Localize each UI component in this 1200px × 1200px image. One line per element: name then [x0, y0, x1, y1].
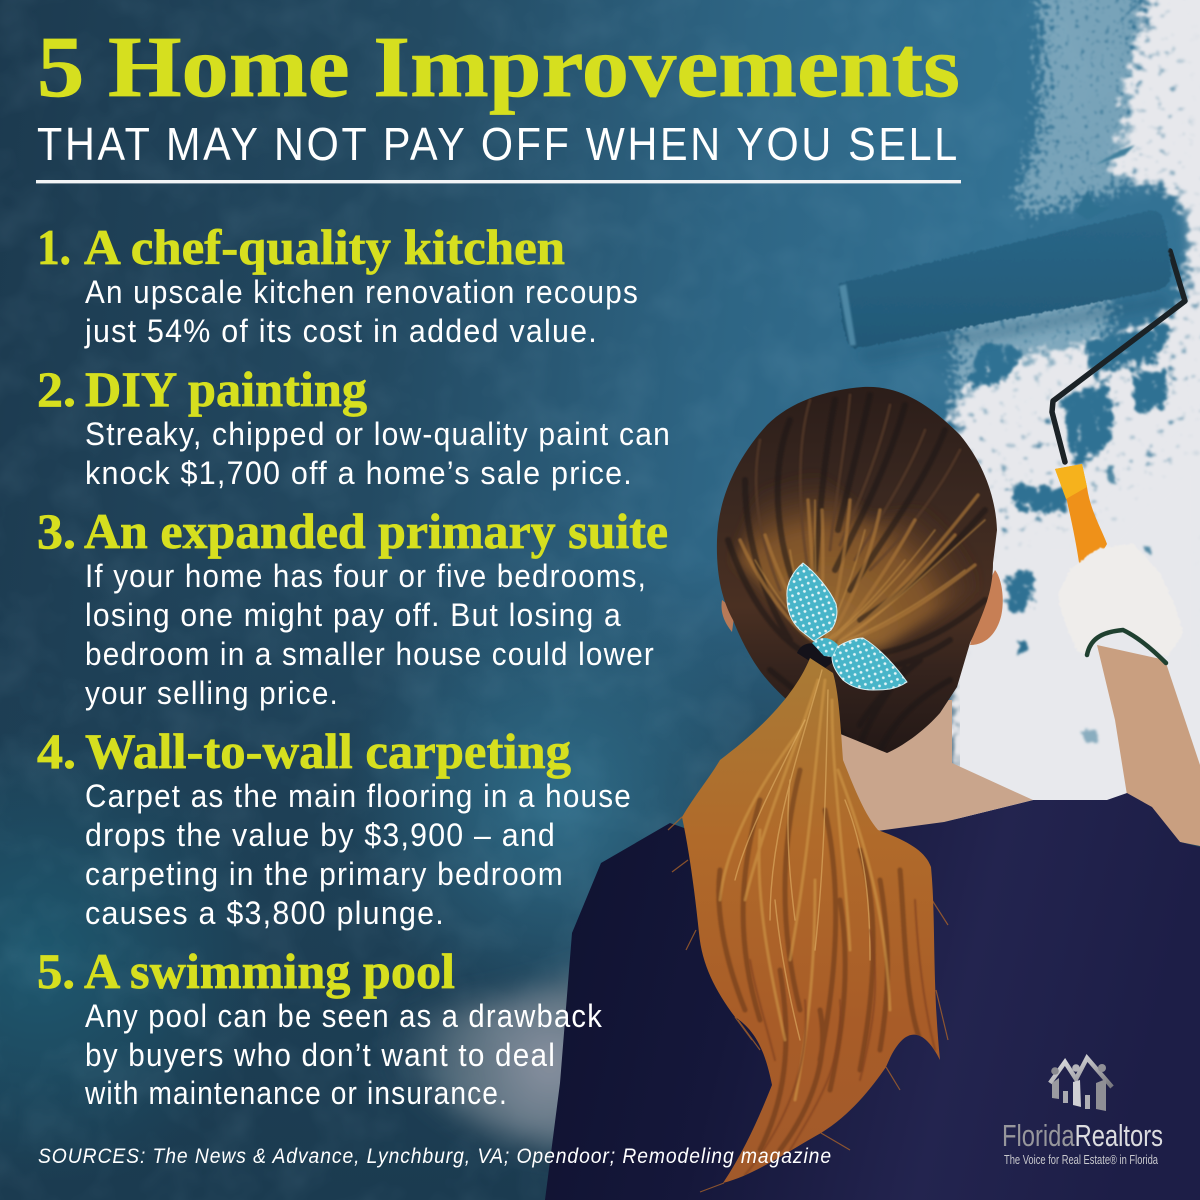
shirt	[545, 793, 1200, 1200]
ponytail	[668, 658, 948, 1192]
neck	[820, 700, 1033, 832]
item 3 heading: An expanded primary suite	[84, 503, 668, 559]
item 5: swimming pool	[37, 943, 603, 1111]
arm	[1097, 645, 1200, 846]
caramel highlight band	[734, 486, 964, 652]
item 4 text: carpeting in the primary bedroom	[85, 856, 564, 892]
large paint blotches	[960, 318, 1175, 616]
item 5 text	[84, 998, 603, 1111]
bow right loop	[832, 638, 907, 690]
item 1 text: just 54% of its cost in added value.	[84, 313, 598, 349]
logo: Florida Realtors	[1002, 1058, 1163, 1167]
item 2 text: Streaky, chipped or low-quality paint can	[85, 416, 671, 452]
item 4 heading: 4.	[37, 723, 76, 779]
woman's hair	[668, 387, 1003, 1192]
speckled dry-brush paint	[1000, 0, 1150, 230]
roller shadow	[860, 295, 1170, 362]
arm and glove	[1058, 544, 1200, 846]
item 1: kitchen	[37, 219, 639, 349]
item 4 text	[85, 778, 632, 931]
title: 5 Home Improvements	[37, 18, 960, 115]
small paint flecks	[1017, 465, 1153, 743]
bow knot	[812, 638, 838, 657]
glove cuff	[1087, 630, 1166, 663]
left ear	[721, 600, 735, 632]
item 4 heading: Wall-to-wall carpeting	[85, 723, 571, 779]
item 4: carpeting	[37, 723, 632, 931]
item 5 text: Any pool can be seen as a drawback	[85, 998, 603, 1034]
bow left loop	[787, 563, 837, 641]
roller sleeve	[838, 210, 1171, 348]
hair tie	[797, 643, 836, 668]
logo house icon	[1050, 1058, 1112, 1111]
item 5 heading: A swimming pool	[84, 943, 455, 999]
head of hair	[717, 387, 997, 753]
item 4 text: Carpet as the main flooring in a house	[85, 778, 632, 814]
paint roller	[838, 210, 1185, 573]
item 3 text: If your home has four or five bedrooms,	[85, 558, 647, 594]
white unpainted area	[945, 0, 1200, 830]
item 5 heading: 5.	[37, 943, 75, 999]
pale cloud of unpainted wall, lower left	[370, 965, 600, 1150]
item 1 heading: 1.	[37, 219, 71, 275]
glove	[1058, 544, 1183, 657]
roller end highlight	[839, 284, 856, 346]
item 5 text: by buyers who don’t want to deal	[85, 1037, 556, 1073]
item 2 text	[85, 416, 671, 491]
item 1 heading: A chef-quality kitchen	[84, 219, 565, 275]
item 2 heading: DIY painting	[85, 361, 367, 417]
logo wordmark: FloridaRealtors	[1002, 1118, 1163, 1153]
subtitle: THAT MAY NOT PAY OFF WHEN YOU SELL	[37, 118, 960, 170]
stray hairs	[668, 800, 948, 1192]
item 4 text: drops the value by $3,900 – and	[85, 817, 556, 853]
item 3: primary suite	[37, 503, 668, 711]
sources: SOURCES: The News & Advance, Lynchburg, VA; Opendoor; Remodeling magazine	[38, 1145, 832, 1168]
right ear	[970, 570, 1003, 645]
item 1 text: An upscale kitchen renovation recoups	[85, 274, 639, 310]
item 2: painting	[37, 361, 671, 491]
item 3 text: your selling price.	[85, 675, 339, 711]
roller handle	[1055, 464, 1107, 573]
item 1 text	[84, 274, 639, 349]
item 4 text: causes a $3,800 plunge.	[85, 895, 445, 931]
title rule	[36, 180, 961, 183]
handle collar	[1055, 464, 1087, 499]
item 5 text: with maintenance or insurance.	[84, 1075, 508, 1111]
item 3 heading: 3.	[37, 503, 76, 559]
item 3 text: bedroom in a smaller house could lower	[85, 636, 655, 672]
roller frame	[1052, 251, 1185, 462]
item 3 text	[85, 558, 655, 711]
item 3 text: losing one might pay off. But losing a	[85, 597, 622, 633]
item 2 text: knock $1,700 off a home’s sale price.	[85, 455, 633, 491]
roller paint streak	[1075, 190, 1110, 220]
item 2 heading: 2.	[37, 361, 76, 417]
